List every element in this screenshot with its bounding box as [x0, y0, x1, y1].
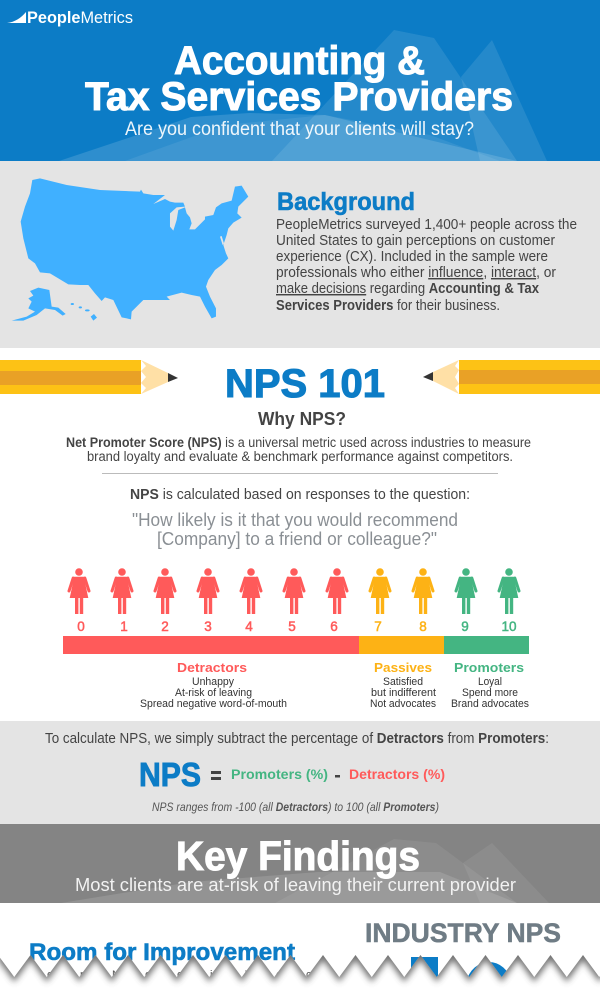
legend: passives: but indifferent [371, 687, 436, 699]
legend: detractors: Detractors [177, 660, 247, 675]
gauge: cut-off industry NPS chart [411, 957, 512, 982]
panel: NPS formula [0, 721, 600, 824]
icon: right pencil [423, 360, 600, 394]
legend: passives [370, 660, 436, 710]
text block: background description: Services Providers for their business. [276, 298, 500, 314]
text block: NPS definition: brand loyalty and evaluate & benchmark performance against competitors. [87, 449, 513, 464]
legend: passives: Passives [374, 660, 432, 675]
legend: detractors: Spread negative word-of-mouth [140, 698, 287, 710]
scale numbers: 0 [77, 619, 85, 634]
panel: key findings banner [0, 824, 600, 903]
title [85, 39, 513, 119]
text block: formula intro: To calculate NPS, we simply subtract the percentage of Detractors from Promoters: [45, 731, 549, 747]
scale numbers: 5 [288, 619, 296, 634]
scale numbers: 3 [204, 619, 212, 634]
scale numbers [77, 619, 517, 634]
header banner [0, 0, 600, 161]
scale numbers: 7 [374, 619, 382, 634]
text block: NPS definition [66, 435, 531, 464]
text block: NPS range: NPS ranges from -100 (all Detractors) to 100 (all Promoters) [152, 800, 439, 814]
formula: Detractors (%) [349, 767, 445, 782]
icons: detractor people 0 to 6 [69, 568, 347, 614]
scale numbers: 1 [120, 619, 128, 634]
legend: detractors: Unhappy [192, 676, 234, 688]
scale numbers: 10 [501, 619, 517, 634]
legend: promoters [451, 660, 529, 710]
legend: passives: Satisfied [383, 676, 423, 688]
quote: survey question [132, 510, 458, 549]
scale numbers: 6 [330, 619, 338, 634]
icon: left pencil [0, 360, 178, 394]
title: Accounting & [174, 39, 425, 83]
segmented score bar [63, 636, 529, 654]
scale numbers: 2 [161, 619, 169, 634]
legend: detractors [140, 660, 287, 710]
heading: Key Findings: Key Findings [176, 833, 420, 879]
icons: passive people 7 to 8 [370, 568, 433, 614]
legend: promoters: Spend more [462, 687, 518, 699]
text block: NPS definition: Net Promoter Score (NPS) is a universal metric used across industries to measure [66, 435, 531, 450]
title: Tax Services Providers [85, 75, 513, 119]
scale numbers: 4 [245, 619, 253, 634]
text block: background description: professionals who either influence, interact, or [276, 265, 556, 281]
scale numbers: 8 [419, 619, 427, 634]
subtitle: Are you confident that your clients will stay? [125, 119, 474, 140]
legend: promoters: Promoters [454, 660, 524, 675]
heading: NPS 101: NPS 101 [225, 362, 385, 406]
subheading: key finding statement: Most clients are at-risk of leaving their current provider [75, 875, 516, 895]
legend: detractors: At-risk of leaving [175, 687, 252, 699]
logo: PeopleMetrics: PeopleMetrics [27, 8, 133, 27]
text block: calculation intro: NPS is calculated based on responses to the question: [130, 487, 470, 503]
text block: background description: experience (CX). Included in the sample were [276, 249, 548, 265]
heading: Background: Background [277, 188, 415, 216]
legend: promoters: Brand advocates [451, 698, 529, 710]
formula [139, 756, 445, 793]
heading: Industry NPS: INDUSTRY NPS [365, 918, 561, 948]
torn paper edge [0, 955, 600, 984]
legend: promoters: Loyal [478, 676, 502, 688]
formula: NPS [139, 756, 201, 793]
text block: background description: United States to gain perceptions on customer [276, 233, 555, 249]
quote: survey question: "How likely is it that you would recommend [132, 510, 458, 530]
text block: background description [276, 217, 577, 314]
text block: background description: make decisions regarding Accounting & Tax [276, 281, 539, 297]
formula: Promoters (%) [231, 767, 328, 782]
chart: NPS scale with people [63, 568, 529, 654]
scale numbers: 9 [461, 619, 469, 634]
quote: survey question: [Company] to a friend or colleague?" [157, 529, 437, 549]
icons: promoter people 9 to 10 [456, 568, 519, 614]
text block: background description: PeopleMetrics surveyed 1,400+ people across the [276, 217, 577, 233]
text fragments: cut-off paragraph: orNooiToo [47, 969, 312, 981]
heading: Room for Improvement: Room for Improvement [29, 939, 295, 966]
legend: passives: Not advocates [370, 698, 436, 710]
icon: USA map [12, 178, 248, 321]
subheading: Why NPS?: Why NPS? [258, 409, 346, 429]
panel: background [0, 161, 600, 348]
